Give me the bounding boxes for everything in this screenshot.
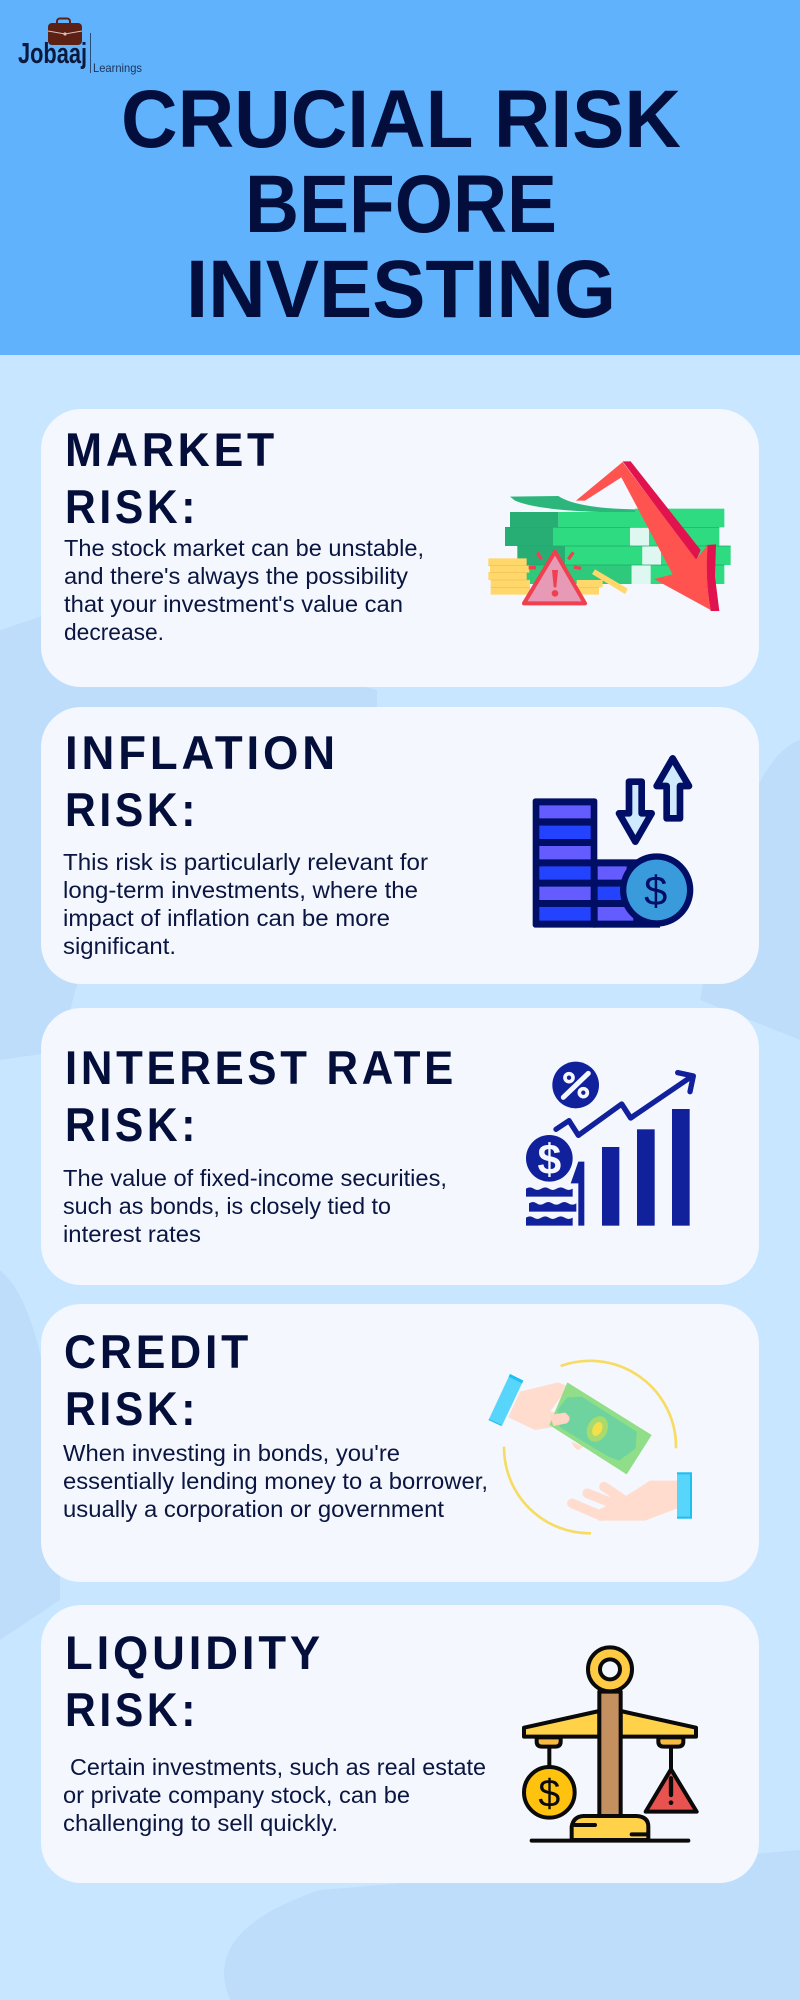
text: credit risk: When investing in bonds, you're	[63, 1440, 400, 1466]
text: market risk: The stock market can be unstable,	[64, 535, 424, 561]
heading: credit risk	[64, 1325, 252, 1435]
heading: credit risk: CREDIT	[64, 1325, 252, 1378]
logo: Jobaaj Learnings	[18, 18, 142, 75]
text: liquidity risk: or private company stock, can be	[63, 1782, 410, 1808]
heading: inflation risk: RISK:	[65, 783, 199, 836]
panel: interest rate risk	[41, 1008, 759, 1285]
title	[121, 74, 681, 335]
icon: hands exchanging a banknote	[488, 1361, 692, 1533]
title: BEFORE	[245, 159, 557, 250]
header band	[0, 0, 800, 355]
text: credit risk: usually a corporation or government	[63, 1496, 444, 1522]
title: INVESTING	[186, 244, 616, 335]
text: interest rate risk: interest rates	[63, 1221, 201, 1247]
heading: interest rate risk: RISK:	[65, 1098, 199, 1151]
text: market risk: that your investment's value can	[64, 591, 403, 617]
text: interest rate risk: such as bonds, is closely tied to	[63, 1193, 391, 1219]
icon: coin stack with up and down arrows: $	[644, 867, 667, 914]
title: CRUCIAL RISK	[121, 74, 681, 165]
text: liquidity risk: Certain investments, such as real estate	[70, 1754, 486, 1780]
text: liquidity risk	[63, 1754, 486, 1836]
heading: inflation risk	[65, 726, 339, 836]
heading: liquidity risk	[65, 1626, 324, 1736]
text: inflation risk	[63, 849, 428, 959]
logo: Jobaaj Learnings: Learnings	[93, 61, 142, 75]
icon: money stack with falling arrow	[488, 461, 731, 611]
heading: liquidity risk: RISK:	[65, 1683, 199, 1736]
panel: inflation risk	[41, 707, 759, 984]
text: interest rate risk	[63, 1165, 447, 1247]
text: credit risk: essentially lending money to a borrower,	[63, 1468, 488, 1494]
icon: balance scale with coin and warning: $	[538, 1772, 560, 1816]
text: inflation risk: impact of inflation can be more	[63, 905, 390, 931]
panel: credit risk	[41, 1304, 759, 1582]
heading: market risk	[65, 423, 278, 533]
heading: market risk: MARKET	[65, 423, 278, 476]
heading: interest rate risk	[65, 1041, 457, 1151]
icon: balance scale with coin and warning	[524, 1647, 697, 1841]
text: market risk: decrease.	[64, 619, 164, 645]
heading: liquidity risk: LIQUIDITY	[65, 1626, 324, 1679]
heading: interest rate risk: INTEREST RATE	[65, 1041, 457, 1094]
icon: coin stack with up and down arrows	[533, 758, 693, 928]
heading: inflation risk: INFLATION	[65, 726, 339, 779]
text: inflation risk: This risk is particularly relevant for	[63, 849, 428, 875]
text: inflation risk: long-term investments, where the	[63, 877, 418, 903]
icon: rising bar chart with percent and dollar	[526, 1062, 693, 1226]
text: interest rate risk: The value of fixed-income securities,	[63, 1165, 447, 1191]
logo: Jobaaj Learnings: Jobaaj	[18, 38, 87, 70]
text: inflation risk: significant.	[63, 933, 176, 959]
text: market risk	[64, 535, 424, 645]
text: credit risk	[63, 1440, 488, 1522]
panel: market risk	[41, 409, 759, 687]
text: market risk: and there's always the possibility	[64, 563, 408, 589]
icon: rising bar chart with percent and dollar: $	[537, 1136, 561, 1184]
text: liquidity risk: challenging to sell quickly.	[63, 1810, 338, 1836]
heading: credit risk: RISK:	[65, 1382, 199, 1435]
heading: market risk: RISK:	[65, 480, 199, 533]
panel: liquidity risk	[41, 1605, 759, 1883]
